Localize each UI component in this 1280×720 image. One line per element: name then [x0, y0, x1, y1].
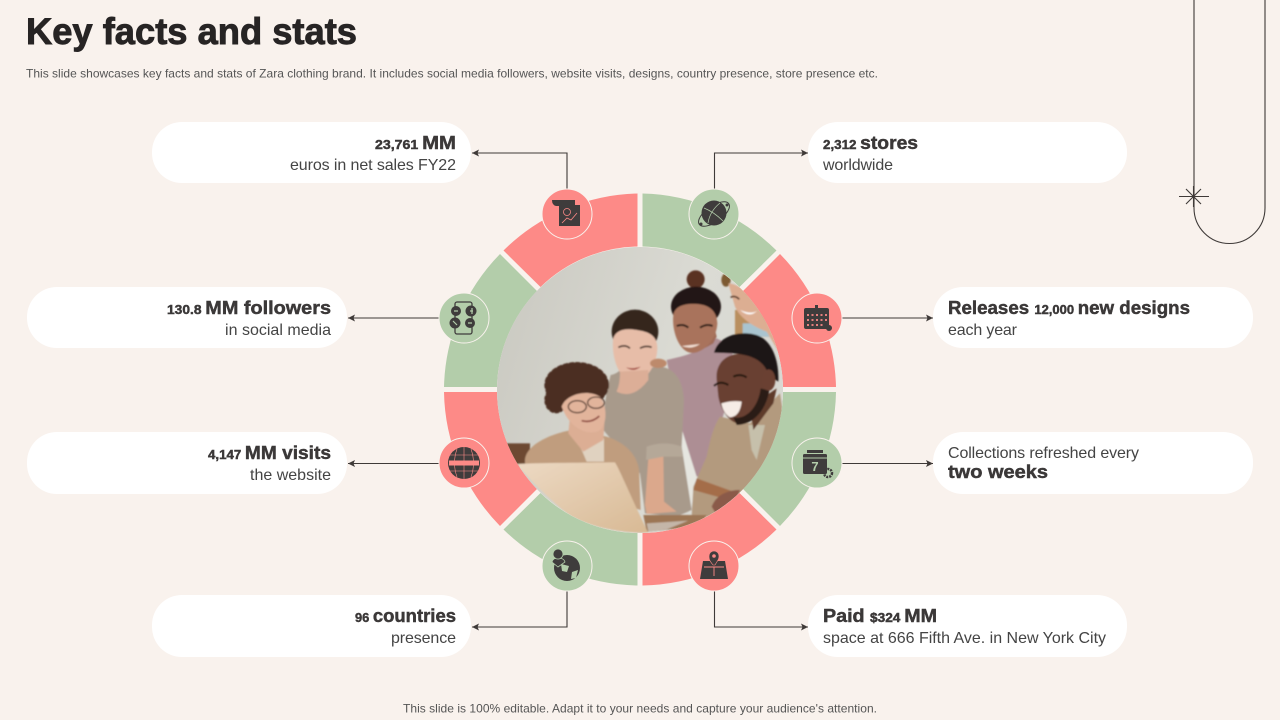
callout: countries	[152, 595, 471, 657]
curly haired woman with glasses	[525, 364, 641, 510]
decorative loop line with star	[1179, 0, 1265, 243]
laptop on table	[517, 462, 707, 533]
callout: new designs: Releases 12,000 new designs	[948, 298, 1190, 318]
callout: new designs: each year	[948, 322, 1018, 339]
callout: stores: 2,312 stores	[823, 133, 918, 153]
donut ring of eight segments	[444, 194, 836, 586]
team photo in circle	[493, 247, 790, 533]
callout: website visits: the website	[250, 467, 331, 484]
arrow: net sales	[472, 153, 567, 189]
icon: phone with social media	[439, 293, 489, 343]
centre woman in taupe sweater	[603, 310, 692, 517]
arrow: countries	[472, 591, 567, 627]
callout: website visits: 4,147 MM visits	[208, 443, 331, 463]
back woman in mauve	[667, 270, 733, 477]
icon: seven day calendar with gear: 7	[811, 459, 819, 474]
arrow: Fifth Avenue	[714, 591, 808, 627]
callout: Fifth Avenue space: Paid $324 MM	[823, 606, 937, 626]
callout: countries: 96 countries	[355, 606, 456, 626]
icon: calendar	[792, 293, 842, 343]
arrow: followers	[348, 317, 439, 319]
arrow: collections	[842, 462, 933, 464]
arrow: visits	[348, 462, 439, 464]
callout: collections refreshed: two weeks	[948, 462, 1048, 482]
callout: new designs	[933, 287, 1253, 348]
callout: collections refreshed: Collections refreshed every	[948, 445, 1139, 462]
callout: followers: in social media	[225, 322, 331, 339]
callout: collections refreshed	[933, 432, 1253, 494]
callout: Fifth Avenue space: space at 666 Fifth Ave. in New York City	[823, 630, 1106, 647]
callout: net sales: 23,761 MM	[375, 133, 456, 153]
callout: net sales	[152, 122, 471, 183]
callout: followers	[27, 287, 347, 348]
callout: stores	[808, 122, 1127, 183]
callout: website visits	[27, 432, 347, 494]
far man behind group	[721, 273, 783, 360]
subtitle text: This slide showcases key facts and stats of Zara clothing brand. It includes social media followers, website visits, designs, country presence, store presence etc.	[26, 66, 878, 80]
callout: stores: worldwide	[822, 157, 893, 174]
icon: globe with orbit	[689, 189, 739, 239]
footer note: This slide is 100% editable. Adapt it to your needs and capture your audience's attention.	[403, 702, 877, 716]
smiling man in beige jacket	[692, 333, 790, 517]
icon: globe with red band	[439, 438, 489, 488]
chair and pale background gap	[507, 434, 698, 506]
title: Key facts and stats	[26, 11, 357, 52]
callout: countries: presence	[391, 630, 456, 647]
callout: followers: 130.8 MM followers	[167, 298, 331, 318]
arrow: designs	[842, 317, 933, 319]
icon: person with globe	[542, 541, 592, 591]
icon: invoice with chart	[542, 189, 592, 239]
icon: map with pin	[689, 541, 739, 591]
icon: seven day calendar with gear	[792, 438, 842, 488]
callout: Fifth Avenue space	[808, 595, 1127, 657]
callout: net sales: euros in net sales FY22	[290, 157, 456, 174]
arrow: stores	[714, 153, 808, 189]
